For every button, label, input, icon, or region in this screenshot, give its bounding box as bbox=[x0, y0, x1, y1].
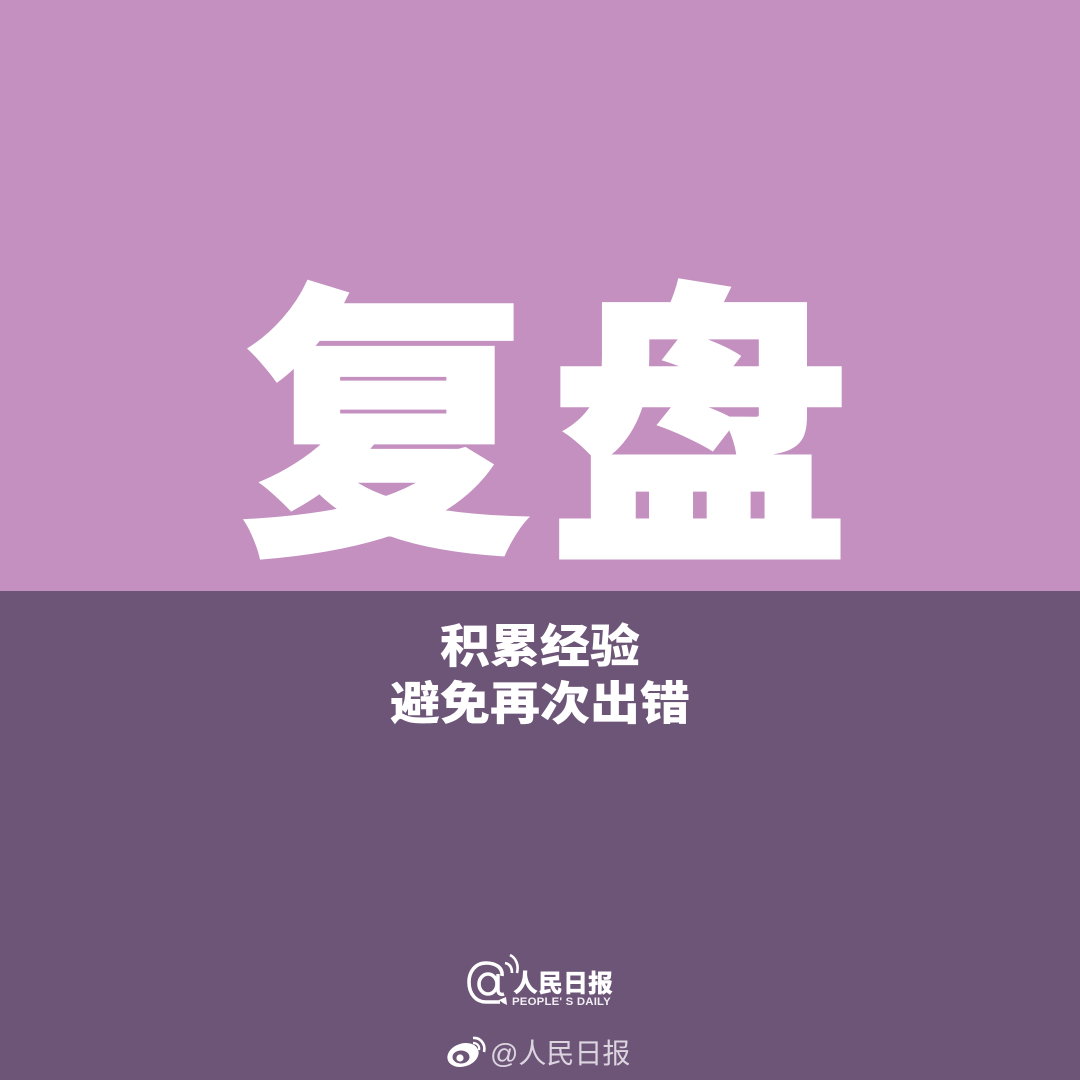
icon: at sign with signal waves bbox=[467, 954, 519, 1005]
subtitle text bbox=[390, 610, 690, 733]
logo: People's Daily bbox=[467, 954, 613, 1008]
logo Chinese name: 人民日报 bbox=[513, 964, 613, 1000]
title bbox=[241, 193, 851, 623]
title character: 盘: 盘 bbox=[549, 193, 851, 623]
icon: Weibo eye bbox=[447, 1036, 486, 1067]
logo English name: PEOPLE' S DAILY bbox=[512, 996, 611, 1008]
watermark: Weibo handle bbox=[447, 1036, 630, 1069]
subtitle line 2: 避免再次出错 bbox=[390, 667, 690, 733]
Weibo account name: @人民日报 bbox=[490, 1038, 630, 1069]
panel: upper lilac background bbox=[0, 0, 1080, 591]
subtitle line 1: 积累经验 bbox=[440, 610, 640, 676]
panel: lower purple background bbox=[0, 591, 1080, 1080]
title character: 复: 复 bbox=[241, 194, 531, 614]
